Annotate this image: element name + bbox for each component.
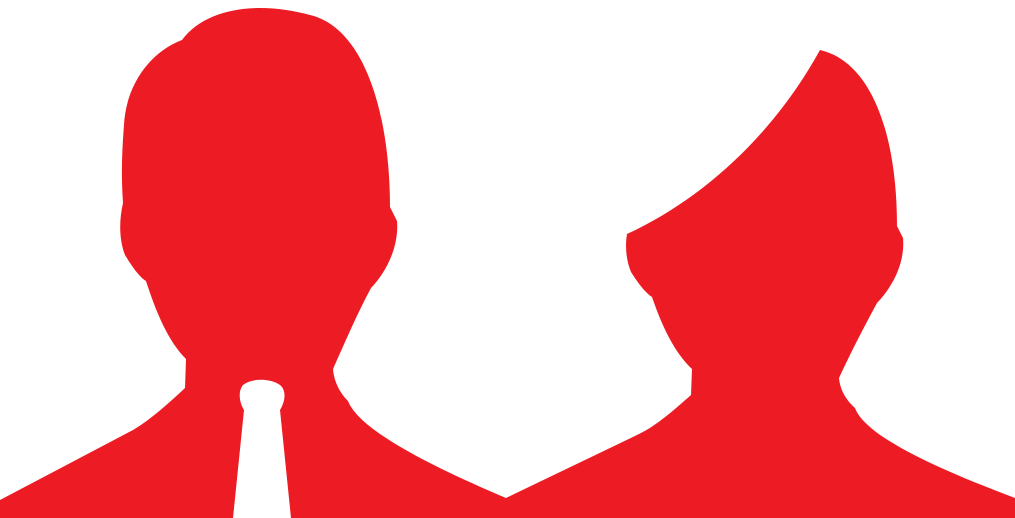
silhouette: left man with tie xyxy=(0,8,506,518)
silhouette: right figure with cut-away head xyxy=(506,50,1015,518)
